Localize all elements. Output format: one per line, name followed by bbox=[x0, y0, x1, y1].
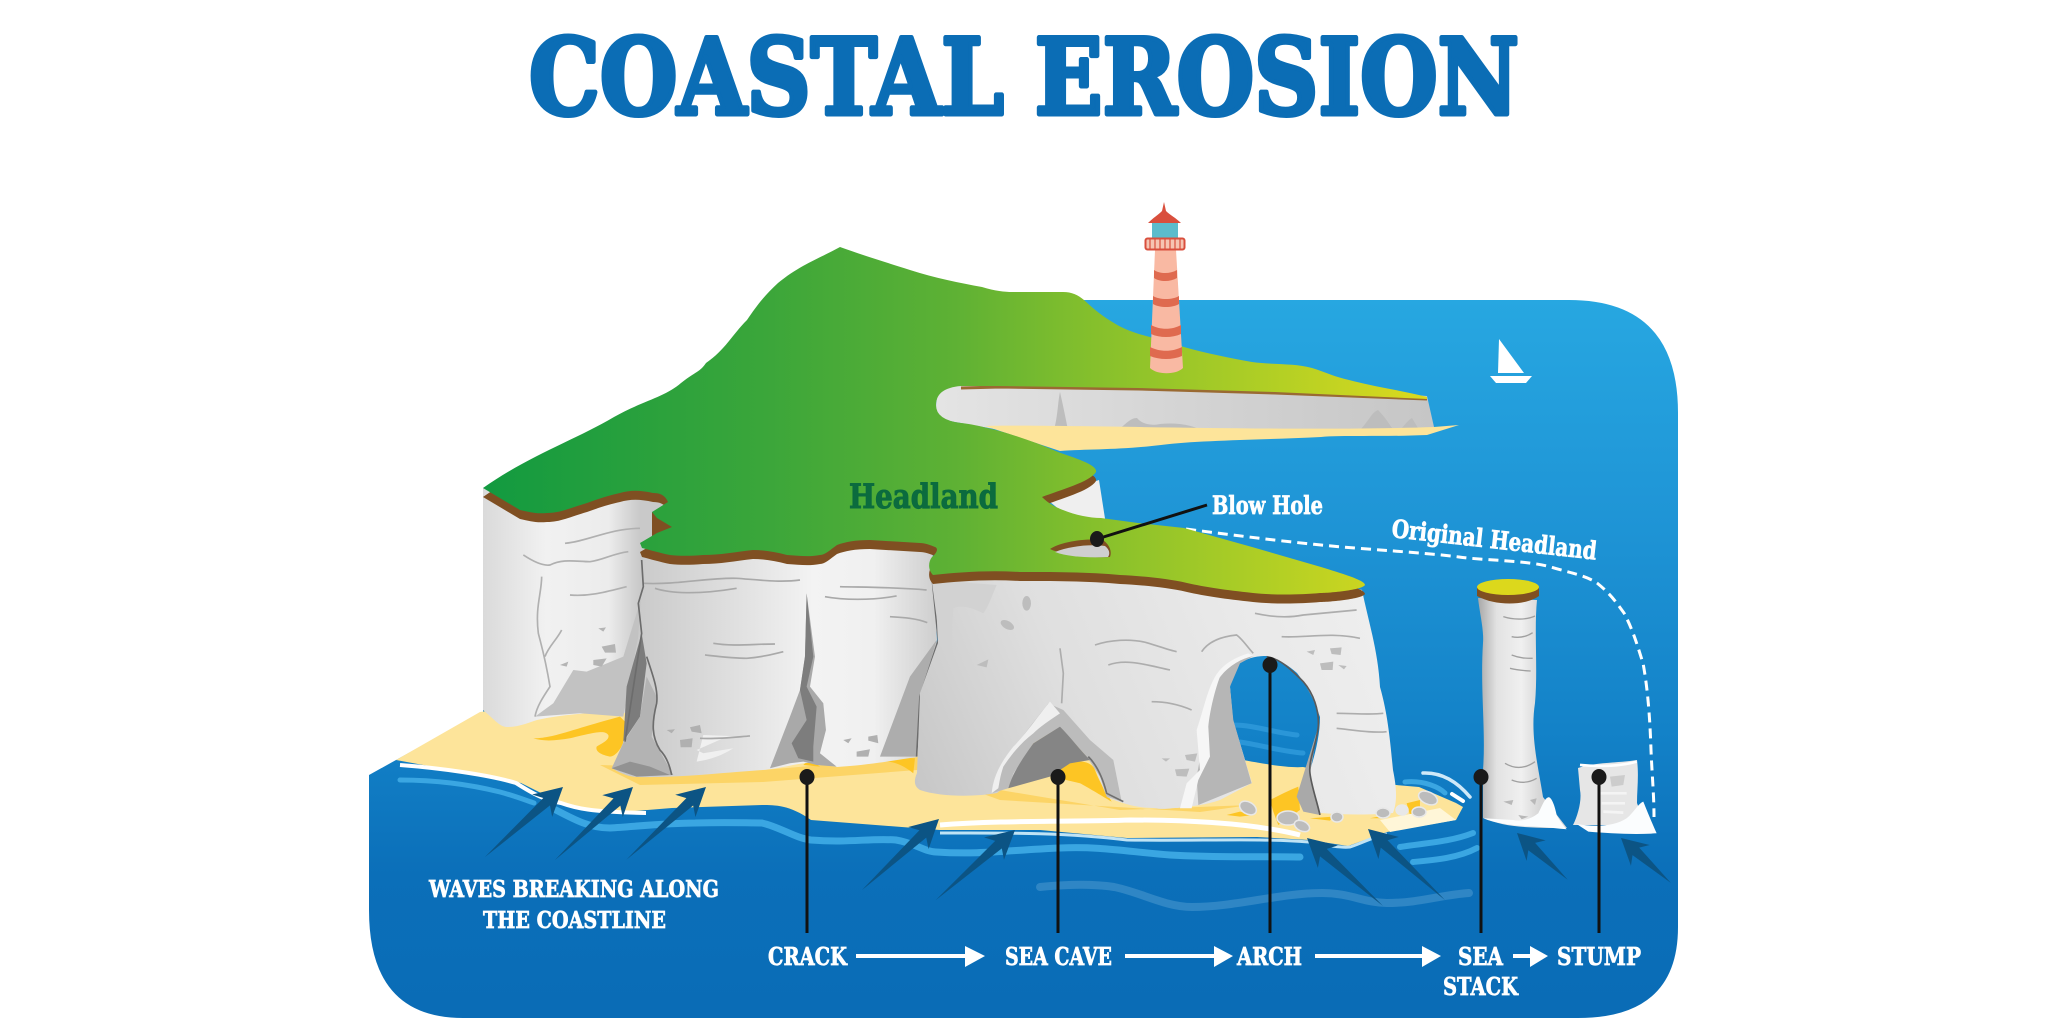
title: COASTAL EROSION bbox=[529, 15, 1519, 139]
label: SEA CAVE: SEA CAVE bbox=[1005, 942, 1112, 971]
label: Original Headland: Original Headland bbox=[1390, 514, 1598, 566]
pointer: crack bbox=[800, 769, 814, 933]
label: SEA STACK: SEA bbox=[1458, 942, 1503, 971]
panel: sea stack bbox=[1477, 579, 1567, 829]
beach bbox=[396, 690, 1463, 847]
arrow: wave direction group bbox=[475, 776, 1680, 917]
sea cave bbox=[992, 703, 1122, 802]
strata lines bbox=[643, 578, 927, 739]
pointer: sea cave bbox=[1050, 769, 1066, 933]
arch right inner edge bbox=[1297, 727, 1320, 815]
icon: sailboat bbox=[1490, 339, 1532, 383]
pitting bbox=[1022, 596, 1031, 611]
pointer: stump bbox=[1592, 769, 1606, 933]
right side shading bbox=[880, 640, 937, 757]
icon: blow hole bbox=[1050, 539, 1111, 557]
strata lines bbox=[1060, 610, 1387, 732]
dashed original headland outline bbox=[1186, 529, 1654, 817]
label: Blow Hole: Blow Hole bbox=[1212, 491, 1323, 520]
waves bbox=[400, 725, 1477, 907]
stack strata lines bbox=[1503, 616, 1537, 782]
panel: land brown soil edge bbox=[483, 386, 1428, 604]
panel: far headland cliff bbox=[936, 378, 1434, 434]
icon: lighthouse bbox=[1146, 202, 1184, 373]
label: waves breaking along the coastline: WAVES BREAKING ALONG bbox=[428, 875, 719, 903]
arrow: crack to sea cave bbox=[856, 946, 985, 967]
label: CRACK: CRACK bbox=[768, 942, 848, 971]
cliff pitting bbox=[560, 627, 616, 667]
panel: cracked cliff bbox=[612, 540, 938, 777]
sand band under the cliffs bbox=[600, 757, 1250, 812]
panel: stump bbox=[1573, 760, 1657, 834]
panel: cave and arch cliff bbox=[915, 540, 1440, 834]
stack base foam bbox=[1483, 797, 1567, 829]
lower pale patch bbox=[697, 735, 747, 762]
stump foam and highlights bbox=[1580, 762, 1637, 766]
label: waves breaking along the coastline bbox=[428, 875, 719, 934]
pointer: blow hole bbox=[1090, 505, 1207, 547]
label: STUMP: STUMP bbox=[1557, 942, 1641, 971]
label: SEA STACK: STACK bbox=[1443, 972, 1519, 1001]
dark edge lines bbox=[625, 560, 938, 775]
panel: green headland bbox=[483, 247, 1427, 594]
pitting bbox=[667, 725, 878, 757]
foam at beach tip bbox=[1380, 808, 1456, 832]
sea background bbox=[369, 300, 1678, 1018]
bright wet sand patches, left bbox=[533, 717, 915, 773]
gap shadow bbox=[623, 633, 647, 742]
arrow: sea cave to arch bbox=[1125, 946, 1233, 967]
label: Headland: Headland bbox=[849, 477, 998, 517]
label: waves breaking along the coastline: THE COASTLINE bbox=[483, 906, 666, 934]
foam on the shore bbox=[400, 765, 646, 813]
upper left shading bbox=[932, 580, 997, 670]
crack bbox=[770, 593, 837, 768]
rocks bbox=[1237, 788, 1440, 834]
arrow: sea stack to stump bbox=[1513, 946, 1548, 967]
pointer: arch bbox=[1262, 657, 1278, 933]
arch inner pillar bbox=[1197, 656, 1253, 805]
panel: left cliff bbox=[483, 480, 672, 727]
arrow: arch to sea stack bbox=[1315, 946, 1441, 967]
cliff strata lines bbox=[523, 528, 640, 717]
cliff foot shading bbox=[612, 677, 673, 777]
label: ARCH: ARCH bbox=[1236, 942, 1302, 971]
far beach bbox=[985, 425, 1459, 451]
small inlet cliff bbox=[1045, 480, 1106, 525]
label: SEA STACK bbox=[1443, 942, 1519, 1001]
cliff base shadow bbox=[535, 600, 641, 717]
bright wet sand patches, right bbox=[1052, 762, 1420, 825]
pointer: sea stack bbox=[1474, 769, 1488, 933]
